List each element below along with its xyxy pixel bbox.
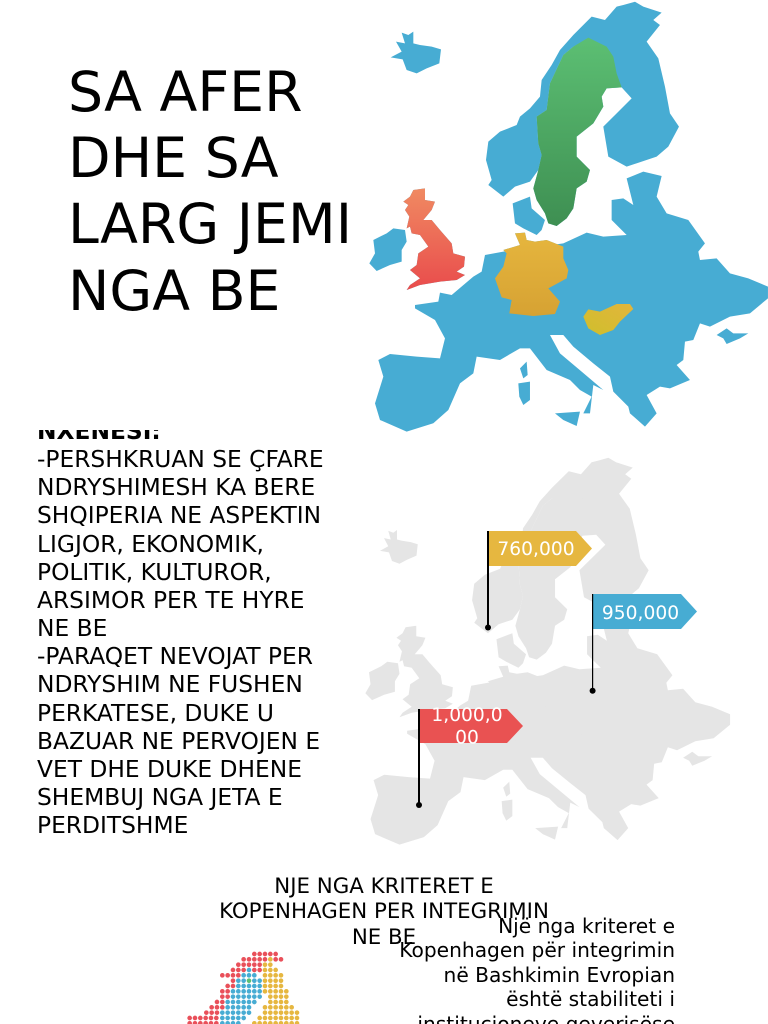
text block: learning outcomes: LIGJOR, EKONOMIK, [37, 530, 264, 558]
flag: 760,000 [485, 531, 592, 630]
title: DHE SA [68, 127, 279, 191]
red dots [190, 954, 281, 1023]
text block: learning outcomes: POLITIK, KULTUROR, [37, 558, 272, 586]
green dot [247, 978, 251, 983]
heading: Copenhagen criteria: NE BE [352, 925, 416, 950]
flag: 1,000,000 [416, 705, 523, 808]
heading: Copenhagen criteria: KOPENHAGEN PER INTEGRIMIN [219, 899, 549, 924]
blue dots [222, 970, 260, 1023]
United Kingdom in red [403, 188, 465, 290]
Germany in gold [495, 233, 568, 316]
map: grey Europe [365, 458, 730, 845]
text block: learning outcomes: -PERSHKRUAN SE ÇFARE [37, 445, 324, 473]
Sweden in green [533, 38, 622, 226]
text block: learning outcomes: NDRYSHIM NE FUSHEN [37, 670, 303, 698]
text block: Copenhagen criteria description [399, 914, 675, 1024]
text block: learning outcomes: ARSIMOR PER TE HYRE [37, 586, 305, 614]
text block: Copenhagen criteria description: Kopenhagen për integrimin [399, 938, 675, 962]
icon: grey Iceland [380, 530, 418, 564]
Hungary in yellow [583, 304, 633, 335]
flag: 950,000: 950,000 [602, 603, 679, 624]
text block: learning outcomes: PERKATESE, DUKE U [37, 699, 274, 727]
text block: Copenhagen criteria description: Një nga kriteret e [498, 914, 675, 938]
text block: learning outcomes: PERDITSHME [37, 811, 188, 839]
text block: learning outcomes: NDRYSHIMESH KA BERE [37, 473, 315, 501]
blue countries of Europe [369, 2, 768, 432]
text block: Copenhagen criteria description: në Bashkimin Evropian [444, 963, 675, 987]
flag: 1,000,000: 1,000,0 [431, 705, 503, 726]
title [68, 61, 352, 324]
text block: learning outcomes [37, 430, 324, 839]
text block: learning outcomes: -PARAQET NEVOJAT PER [37, 642, 313, 670]
gold dots [254, 959, 297, 1023]
title: LARG JEMI [68, 193, 352, 257]
text block: learning outcomes: SHEMBUJ NGA JETA E [37, 783, 283, 811]
title: SA AFER [68, 61, 303, 125]
map: coloured Europe [369, 2, 768, 432]
text block: learning outcomes: BAZUAR NE PERVOJEN E [37, 727, 320, 755]
title: NGA BE [68, 260, 280, 324]
flag: 760,000: 760,000 [497, 539, 575, 560]
text block: learning outcomes: VET DHE DUKE DHENE [37, 755, 302, 783]
icon: Iceland [391, 32, 441, 73]
heading: Copenhagen criteria: NJE NGA KRITERET E [274, 874, 494, 899]
flag: 1,000,000: 00 [455, 728, 479, 748]
heading: Copenhagen criteria [219, 874, 549, 950]
dotted map [190, 954, 297, 1023]
flag: 950,000 [590, 594, 697, 694]
text block: learning outcomes: SHQIPERIA NE ASPEKTIN [37, 501, 321, 529]
text block: Copenhagen criteria description: është stabiliteti i [506, 987, 675, 1011]
text block: learning outcomes: NE BE [37, 614, 107, 642]
grey countries of Europe [365, 458, 730, 845]
